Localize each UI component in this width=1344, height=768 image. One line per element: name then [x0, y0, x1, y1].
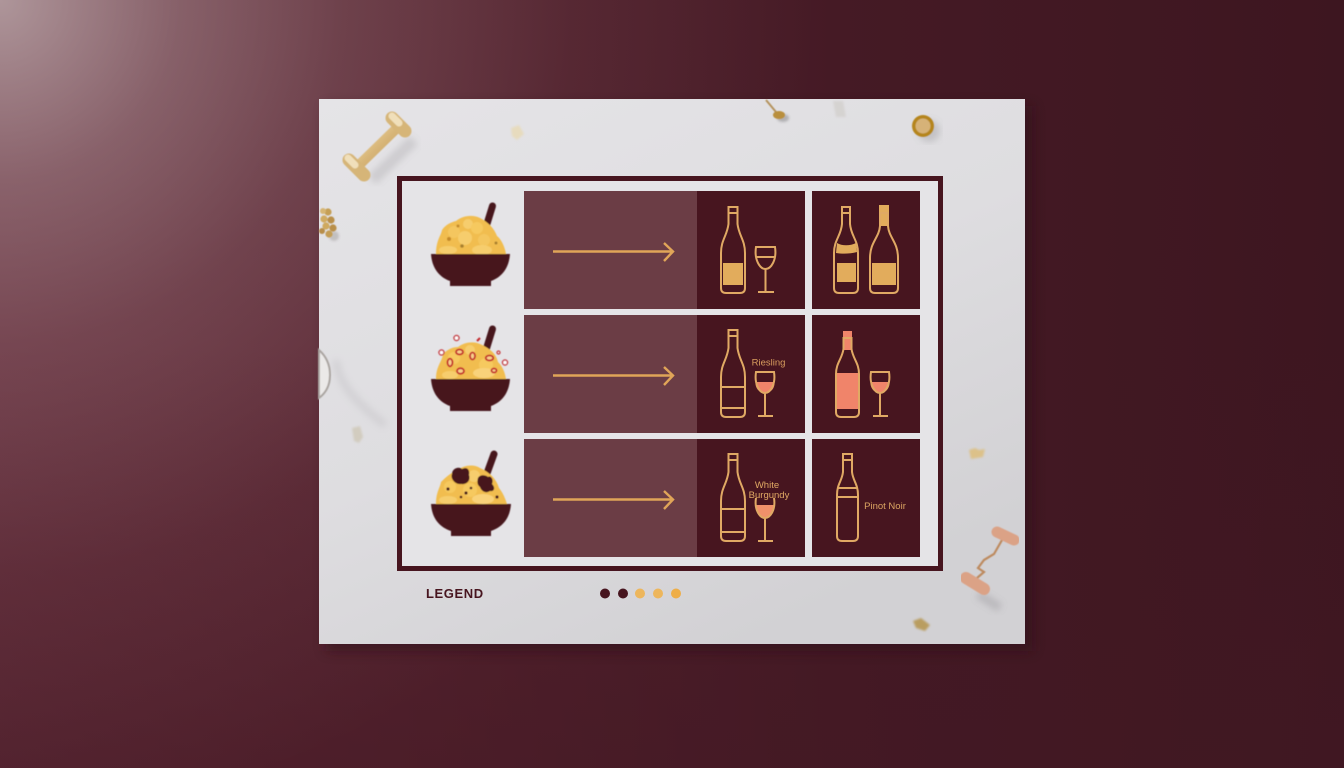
decoration: magnifier edge [319, 350, 385, 425]
row 3 wine cell B: bottle and Pinot Noir label: Pinot Noir [864, 501, 906, 512]
decoration: gold dumbbell [348, 116, 414, 180]
row 3 wine cell A: bottle, glass and White Burgundy label: Burgundy [749, 490, 790, 501]
row 1 middle cell with arrow [524, 191, 697, 309]
row 1 [431, 191, 920, 309]
row 3 wine cell A: bottle, glass and White Burgundy label [697, 439, 805, 557]
row 3 [431, 439, 920, 557]
decoration: corkscrew [966, 532, 1014, 608]
row 2 wine cell A: bottle, glass and Riesling label: Riesling [752, 358, 785, 368]
row 1 bowl icon: plain pasta [431, 206, 510, 286]
decoration: small crumbs [352, 101, 985, 631]
main frame [400, 178, 940, 568]
decoration: small gold spoon [766, 100, 789, 122]
row 3 middle cell with arrow [524, 439, 697, 557]
row 3 wine cell B: bottle and Pinot Noir label [812, 439, 920, 557]
legend dots [600, 588, 681, 598]
decoration: gold beads [319, 208, 339, 241]
legend heading: LEGEND [426, 586, 484, 601]
row 2 middle cell with arrow [524, 315, 697, 433]
decoration: gold ring [912, 115, 940, 142]
row 2 wine cell A: bottle, glass and Riesling label [697, 315, 805, 433]
panel: paper sheet [319, 99, 1032, 651]
row 2 wine cell B: rosé bottle and glass [812, 315, 920, 433]
row 2 bowl icon: spicy pasta [431, 329, 510, 411]
row 3 bowl icon: pasta with mushrooms [431, 454, 511, 536]
row 2 [431, 315, 920, 433]
row 1 wine cell B: two bottles [812, 191, 920, 309]
row 3 wine cell A: bottle, glass and White Burgundy label: White [755, 480, 779, 491]
row 1 wine cell A: bottle and glass [697, 191, 805, 309]
